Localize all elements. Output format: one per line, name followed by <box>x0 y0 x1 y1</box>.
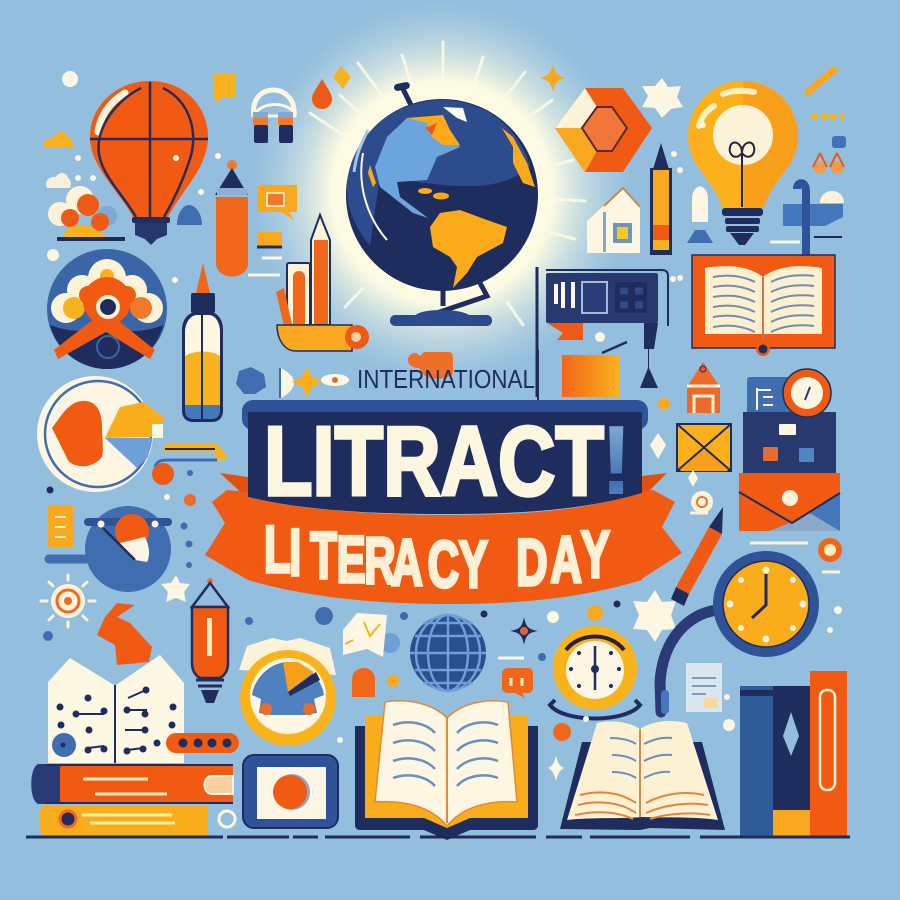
icon: small ring left of pencil <box>690 491 808 543</box>
icon: pencil <box>650 143 672 255</box>
icon: cream cloud <box>46 173 71 188</box>
icon: small lamp <box>687 186 713 243</box>
icon: sun rays <box>310 42 585 325</box>
icon: open white book with dots <box>48 655 184 763</box>
icon: orange earrings <box>812 117 846 174</box>
icon: open book framed <box>692 255 835 356</box>
icon: star <box>642 78 683 118</box>
icon: dial clock with paper <box>239 638 336 746</box>
icon: sparkle <box>548 756 564 781</box>
icon: orange pill with dots <box>166 733 239 753</box>
icon: star white <box>633 590 676 642</box>
ribbon: back folds <box>205 473 682 580</box>
icon: small orange badge <box>352 668 375 697</box>
icon: white half disc <box>280 368 294 398</box>
icon: eye <box>321 374 349 386</box>
icon: rounded screen <box>243 755 338 828</box>
icon: blue hexagon <box>236 367 266 394</box>
icon: blue dome <box>177 205 202 225</box>
title: Litract: LITRACT <box>264 406 604 516</box>
icon: desk lamp with bowl <box>770 183 844 255</box>
icon: central open book <box>355 701 538 840</box>
icon: alarm clock <box>550 605 640 718</box>
icon: control panel machine <box>537 267 668 397</box>
icon: wire globe <box>410 615 486 691</box>
icon: speech bubble <box>257 185 297 220</box>
icon: light bulb <box>688 81 798 245</box>
icon: flower medallion <box>47 249 167 369</box>
heading: International: INTERNATIONAL <box>357 364 535 394</box>
icon: red house <box>687 362 720 413</box>
icon: tilted open book <box>560 721 725 830</box>
icon: pencils in hand tray <box>276 215 369 351</box>
icon: folder with clock <box>743 369 836 474</box>
icon: gold star <box>292 367 322 397</box>
title: exclamation mark: ! <box>600 405 633 515</box>
icon: gold note <box>48 506 73 547</box>
icon: cloud cluster <box>48 186 125 241</box>
globe glow <box>252 2 632 382</box>
icon: orange house on label <box>408 352 453 379</box>
icon: speech bubble orange <box>502 668 533 698</box>
icon: cream star <box>161 575 190 602</box>
icon: orange box <box>562 342 627 397</box>
icon: red envelope <box>739 473 840 531</box>
icon: gold diamond <box>333 66 351 89</box>
icon: pie circle <box>37 376 165 492</box>
icon: orange bird <box>97 603 152 665</box>
icon: globe <box>346 81 538 326</box>
icon: gold cloud <box>43 132 73 147</box>
icon: document pages <box>686 663 722 712</box>
icon: note with lines <box>248 232 282 275</box>
icon: small orange coin <box>553 723 571 741</box>
icon: hot air balloon <box>90 81 208 245</box>
title: Literacy Day: LITERACY DAY <box>264 512 610 601</box>
banner: dark title panel <box>242 400 648 514</box>
icon: orange drop <box>312 79 332 109</box>
icon: orange marker <box>215 160 248 276</box>
icon: gold sparkle <box>540 64 566 92</box>
icon: pencil diagonal <box>671 507 723 606</box>
shelf line <box>26 836 850 838</box>
icon: big clock with handle <box>660 551 819 712</box>
icon: magnifier gadget <box>49 506 171 592</box>
icon: book stack <box>31 764 235 835</box>
icon: glue bottle <box>182 263 223 422</box>
icon: gold dash <box>808 70 834 92</box>
icon: four point star <box>510 617 538 645</box>
icon: upright books <box>740 671 847 836</box>
icon: capsule pen <box>192 578 228 703</box>
icon: gold hook and ball <box>152 443 228 485</box>
icon: small note <box>214 74 236 103</box>
icon: target sun <box>41 575 95 627</box>
line beside label <box>537 350 539 400</box>
icon: headphones <box>253 90 294 143</box>
icon: envelope small <box>677 424 731 471</box>
confetti: small dots and dashes <box>43 71 842 743</box>
icon: small blue circle <box>315 607 333 625</box>
ribbon: orange banner <box>247 493 642 604</box>
icon: hexagon gem <box>555 88 652 172</box>
icon: house outline <box>587 188 640 253</box>
icon: paper and blob <box>343 613 400 657</box>
icon: small ring right <box>818 538 842 572</box>
